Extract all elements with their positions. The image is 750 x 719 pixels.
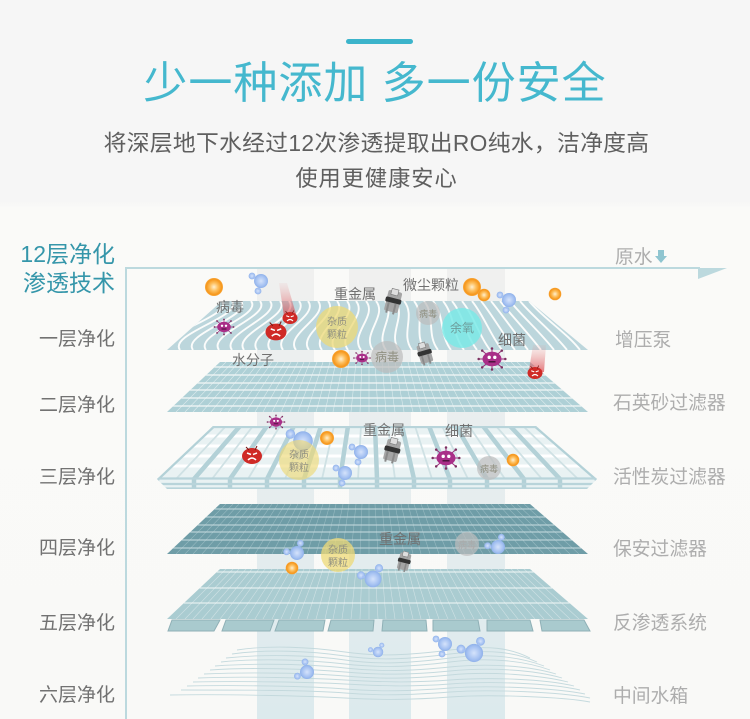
blue molecule behind impurity circle: [286, 429, 313, 460]
yellow impurity circles: [279, 306, 358, 572]
pollutant labels: 重金属: [379, 531, 421, 547]
layer labels: 四层净化: [39, 537, 115, 559]
stage labels: 中间水箱: [613, 685, 688, 706]
yellow impurity circles: 杂质: [327, 316, 347, 328]
pollutant labels: [216, 277, 526, 547]
cyan residual chlorine circle: [442, 308, 482, 348]
yellow impurity circles: 颗粒: [327, 328, 347, 341]
stage labels: 原水: [615, 246, 653, 267]
grey circle labels: 病毒: [480, 463, 498, 474]
intro text: 将深层地下水经过12次渗透提取出RO纯水，洁净度高: [104, 130, 649, 156]
layer 4: dark grid: [150, 504, 600, 554]
blue water molecules: [249, 273, 516, 686]
grey circle labels: 病毒: [458, 539, 476, 550]
intro text: [104, 130, 649, 191]
layer 5: lower frames: [168, 620, 590, 631]
layer labels: 五层净化: [39, 612, 115, 634]
layer 2: fine grid: [150, 362, 600, 412]
grey circle labels: 病毒: [419, 308, 437, 319]
pollutant labels: 细菌: [445, 423, 473, 439]
layer labels: 六层净化: [39, 684, 115, 706]
heavy metal icons: [381, 287, 440, 573]
side heading: 渗透技术: [23, 270, 115, 296]
layer 1: wave filter: [160, 301, 590, 350]
pollutant labels: 微尘颗粒: [403, 277, 459, 293]
layer 6: water waves: [170, 647, 590, 702]
side heading: [20, 241, 115, 296]
stage labels: 增压泵: [615, 329, 672, 350]
grey virus circles: [371, 301, 501, 556]
pollutant labels: 水分子: [232, 352, 274, 368]
stage labels: 反渗透系统: [613, 612, 707, 633]
light columns behind the filters: [257, 268, 505, 719]
grey circle labels: 病毒: [375, 349, 399, 364]
layer labels: 一层净化: [39, 328, 115, 350]
icon: down arrow: [655, 250, 667, 263]
pollutant labels: 细菌: [498, 332, 526, 348]
pollutant labels: 重金属: [363, 422, 405, 438]
yellow impurity circles: 颗粒: [289, 461, 309, 474]
red bacteria: [242, 310, 542, 464]
cyan residual chlorine circle: 余氧: [450, 320, 474, 335]
stage labels: 保安过滤器: [613, 538, 707, 559]
intro text: 使用更健康安心: [295, 166, 458, 191]
layer labels: 二层净化: [39, 394, 115, 416]
stage labels: 活性炭过滤器: [613, 466, 726, 487]
layer labels: [39, 328, 115, 706]
pollutant labels: 病毒: [216, 299, 244, 315]
yellow impurity circles: 颗粒: [328, 556, 348, 569]
stage labels: 石英砂过滤器: [613, 392, 726, 413]
yellow impurity circles: 杂质: [328, 544, 348, 556]
axis with arrow: [125, 267, 727, 719]
layer 5: membrane grid: [150, 569, 600, 619]
side heading: 12层净化: [20, 241, 115, 267]
yellow impurity circles: 杂质: [289, 449, 309, 461]
stage labels: [613, 246, 726, 706]
orange particles: [205, 278, 561, 574]
pollutant labels: 重金属: [334, 286, 376, 302]
red trails: [279, 283, 546, 372]
grey circle labels: [375, 308, 498, 550]
title: 少一种添加 多一份安全: [143, 59, 607, 108]
purple viruses: [214, 319, 507, 470]
accent bar: [346, 39, 413, 44]
layer 3: open frame filter: [150, 426, 600, 490]
layer labels: 三层净化: [39, 466, 115, 488]
